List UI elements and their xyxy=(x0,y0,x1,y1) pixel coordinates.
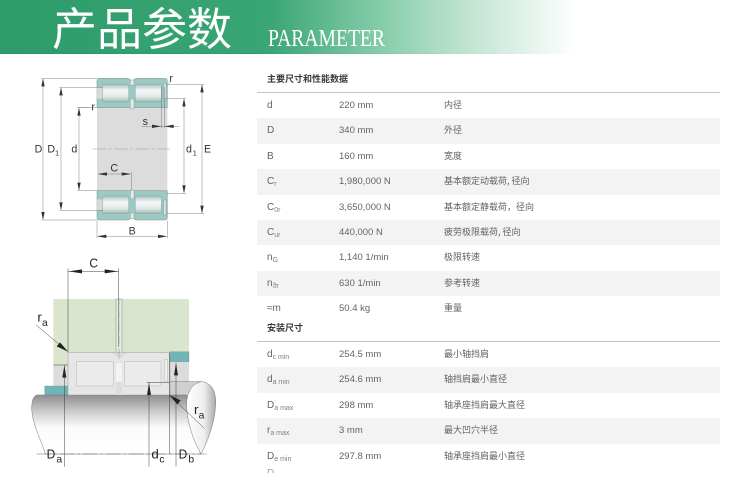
diagram: bearing cross-section dimensions: r xyxy=(169,73,173,85)
table: mounting dimensions: dc min xyxy=(267,349,289,361)
table: main dimensions and performance data: 极限转速 xyxy=(444,250,480,263)
table: mounting dimensions: 轴承座挡肩最大直径 xyxy=(444,398,525,411)
table: mounting dimensions: 298 mm xyxy=(339,400,373,411)
table: mounting dimensions: 最小轴挡肩 xyxy=(444,347,489,360)
table: main dimensions and performance data: 宽度 xyxy=(444,149,462,162)
table: main dimensions and performance data: B xyxy=(267,151,274,162)
table: main dimensions and performance data: 3,650,000 N xyxy=(339,202,391,213)
table: main dimensions and performance data: Cr xyxy=(267,176,277,188)
diagram: mounting dimensions: a xyxy=(56,454,62,465)
header banner: PARAMETER xyxy=(268,26,385,52)
table: main dimensions and performance data: d xyxy=(267,100,273,111)
diagram: bearing cross-section dimensions: r xyxy=(91,102,95,114)
diagram: mounting dimensions: r xyxy=(37,310,42,325)
diagram: bearing cross-section dimensions: d xyxy=(186,144,192,156)
diagram: mounting dimensions xyxy=(32,255,216,467)
diagram: mounting dimensions: D xyxy=(179,446,187,461)
table: mounting dimensions: da min xyxy=(267,374,290,386)
diagram: bearing cross-section dimensions: B xyxy=(129,226,136,238)
table: mounting dimensions: 轴承座挡肩最小直径 xyxy=(444,449,525,462)
heading: main dimensions and performance data: 主要尺寸和性能数据 xyxy=(267,72,348,85)
table: main dimensions and performance data: 基本额定静载荷，径向 xyxy=(444,200,534,213)
table: main dimensions and performance data: 外径 xyxy=(444,123,462,136)
diagram: bearing cross-section dimensions: E xyxy=(204,144,211,156)
diagram: mounting dimensions: c xyxy=(159,454,165,465)
diagram: bearing cross-section dimensions: C xyxy=(110,163,118,175)
diagram: mounting dimensions: D xyxy=(47,446,55,461)
table: main dimensions and performance data: 1,140 1/min xyxy=(339,252,389,263)
table: mounting dimensions: 轴挡肩最小直径 xyxy=(444,372,507,385)
table: mounting dimensions: De min xyxy=(267,451,291,463)
table: main dimensions and performance data: nϑr xyxy=(267,278,279,290)
table: main dimensions and performance data xyxy=(257,98,720,314)
heading: mounting dimensions: 安装尺寸 xyxy=(267,321,303,334)
table: main dimensions and performance data: 参考转速 xyxy=(444,276,480,289)
table: main dimensions and performance data: 疲劳极限载荷, 径向 xyxy=(444,225,521,238)
table: mounting dimensions: 297.8 mm xyxy=(339,451,381,462)
diagram: bearing cross-section dimensions: d xyxy=(71,144,77,156)
header banner xyxy=(0,0,562,55)
table: main dimensions and performance data: C0r xyxy=(267,202,280,214)
table: mounting dimensions xyxy=(257,347,720,463)
diagram: mounting dimensions: C xyxy=(89,255,98,270)
diagram: bearing cross-section dimensions: 1 xyxy=(193,148,197,157)
diagram: mounting dimensions: d xyxy=(151,446,159,461)
table: mounting dimensions: 254.6 mm xyxy=(339,374,381,385)
diagram: mounting dimensions: a xyxy=(199,410,205,421)
table: mounting dimensions: 最大凹穴半径 xyxy=(444,423,498,436)
table: main dimensions and performance data: 内径 xyxy=(444,98,462,111)
table: main dimensions and performance data: 440,000 N xyxy=(339,227,383,238)
table: main dimensions and performance data: Cur xyxy=(267,227,280,239)
diagram: bearing cross-section dimensions xyxy=(35,73,211,238)
diagram: mounting dimensions: b xyxy=(188,454,194,465)
diagram: bearing cross-section dimensions: 1 xyxy=(55,148,59,157)
diagram: bearing cross-section dimensions: s xyxy=(143,116,148,128)
table: main dimensions and performance data: 重量 xyxy=(444,301,462,314)
table: main dimensions and performance data: 基本额定动载荷, 径向 xyxy=(444,174,530,187)
table: main dimensions and performance data: 630 1/min xyxy=(339,278,381,289)
table: mounting dimensions: 3 mm xyxy=(339,425,363,436)
table: main dimensions and performance data: nG xyxy=(267,252,278,264)
table: mounting dimensions: 254.5 mm xyxy=(339,349,381,360)
table: mounting dimensions: Da max xyxy=(267,400,293,412)
table: main dimensions and performance data: ≈m xyxy=(267,303,281,314)
table: main dimensions and performance data: 50.4 kg xyxy=(339,303,370,314)
diagram: mounting dimensions: a xyxy=(42,318,48,329)
table: main dimensions and performance data: 160 mm xyxy=(339,151,373,162)
diagram: mounting dimensions: r xyxy=(194,402,199,417)
diagram: bearing cross-section dimensions: D xyxy=(35,144,43,156)
table: main dimensions and performance data: 1,980,000 N xyxy=(339,176,391,187)
table: main dimensions and performance data: D xyxy=(267,125,274,136)
diagram: bearing cross-section dimensions: D xyxy=(47,144,55,156)
table: main dimensions and performance data: 340 mm xyxy=(339,125,373,136)
table: main dimensions and performance data: 220 mm xyxy=(339,100,373,111)
table: mounting dimensions: ra max xyxy=(267,425,289,437)
